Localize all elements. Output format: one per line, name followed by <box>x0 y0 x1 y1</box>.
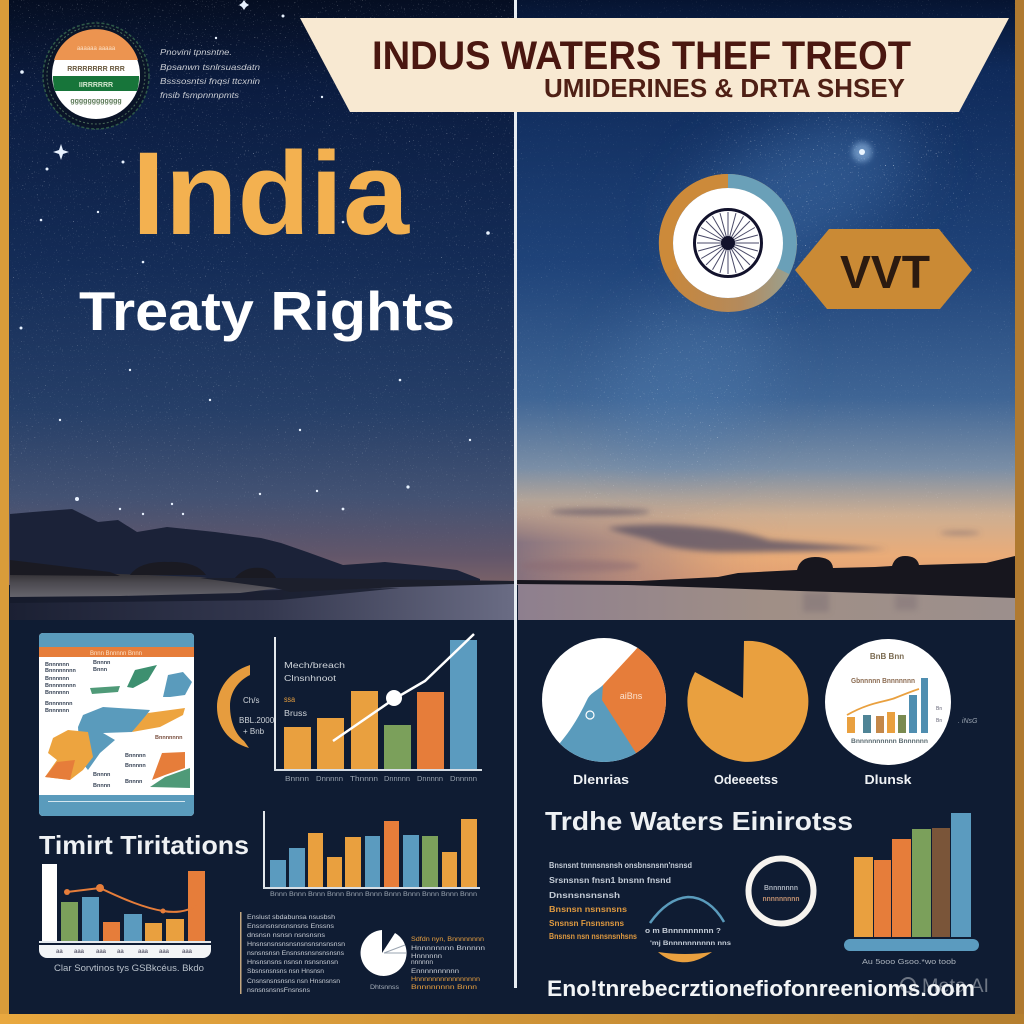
text block: lower right notes: Bnsnsn nsnsnsns <box>549 905 628 914</box>
chart: bar chart with trend line: Dnnnnn <box>417 776 443 783</box>
chart: small pie with legend: Ennnnnnnnnn <box>411 969 459 975</box>
dark lower panel <box>10 620 1015 1014</box>
emblem: seal with tricolour: aaaaaa aaaaa <box>77 46 116 52</box>
chart: bars on tray with line: aaa <box>74 949 85 955</box>
chart: bars on tray with line: aaa <box>182 949 193 955</box>
text block: lower left notes <box>240 912 345 994</box>
chart: small pie with legend: Dhtsnnss <box>370 985 399 991</box>
emblem caption text: Pnovini tpnsntne. <box>160 47 232 57</box>
chart: bars on tray with line: aa <box>56 949 63 955</box>
emblem: seal with tricolour: RRRRRRRR RRR <box>67 66 125 73</box>
chart: bar chart with trend line: Bnnnn <box>285 776 309 783</box>
text block: lower right notes: Srsnsnsn fnsn1 bnsnn fnsnd <box>549 876 671 885</box>
ring with label: nnnnnnnnn <box>762 896 800 903</box>
ring with label: Bnnnnnnn <box>764 885 798 892</box>
heading: Trdhe Waters Einirotss: Trdhe Waters Einirotss <box>545 806 853 836</box>
text block: lower left notes: Sbsnsnsnsns nsn Hnsnsn <box>247 969 324 975</box>
gauge arc: + Bnb <box>243 727 265 736</box>
map legend text: Bnnnnnnnn <box>45 668 76 674</box>
divider <box>514 0 517 988</box>
chart: small pie with legend <box>361 930 485 991</box>
gauge arc: Ch/s <box>243 696 259 705</box>
landscape: right water <box>518 584 1015 620</box>
landscape: left water <box>10 584 514 620</box>
map legend text: Bnnnnn <box>125 763 146 769</box>
map legend text: Bnnnnnn <box>45 676 70 682</box>
chart: white circle with mini chart: BnB Bnn <box>870 652 904 661</box>
map shapes <box>45 665 192 788</box>
emblem caption text <box>160 47 260 100</box>
chart: small pie with legend: Sdfdn nyn, Bnnnnnnnn <box>411 937 484 943</box>
text block: lower left notes: nsnsnsnsn Ensnsnsnsnsnsnsns <box>247 951 344 957</box>
chart: white circle with mini chart: Bn <box>936 706 942 712</box>
chart: bars on tray with line: aaa <box>159 949 170 955</box>
chart: bars on tray with line: aaa <box>138 949 149 955</box>
map legend text: Bnnnnn <box>125 753 146 759</box>
chart: small pie with legend: Bnnnnnnnn Bnnn <box>411 985 477 991</box>
footer text: Enoǃtnrebecrztionefiofonreenioms.oom <box>547 976 975 1001</box>
text block: lower right notes: Dnsnsnsnsnsh <box>549 891 620 900</box>
chart: bar chart with trend line: Bruss <box>284 709 307 718</box>
chart: bar chart with trend line: ssa <box>284 695 295 704</box>
text block: lower right notes: Snsnsn Fnsnsnsns <box>549 919 625 928</box>
chart: three-segment pie <box>540 636 670 787</box>
title banner <box>300 18 1009 112</box>
landscape: right shore with trees <box>517 556 1015 598</box>
map legend text <box>45 660 183 789</box>
gauge arc: BBL.2000 <box>239 716 275 725</box>
chart: stepped bars on blue base <box>844 813 979 966</box>
emblem: seal with tricolour: gggggggggggg <box>70 98 122 105</box>
landscape: left mountains <box>10 509 480 584</box>
emblem caption text: Bsssosntsi fnqsi ttcxnin <box>160 76 260 86</box>
ring with label <box>748 858 814 924</box>
chart: bar chart with trend line: Thnnnn <box>350 776 378 783</box>
chart: three-segment pie: Dlenrias <box>573 772 629 787</box>
map legend text: Bnnnnnnnn <box>45 683 76 689</box>
chart: orange pie with notch <box>687 641 808 787</box>
map legend text: Bnnnnnn <box>45 708 70 714</box>
chart: bars on tray with line: Clar Sorvtinos tys GSBkcéus. Bkdo <box>54 963 204 973</box>
hexagon badge <box>795 229 972 309</box>
chart: white circle with mini chart: Bnnnnnnnnnn Bnnnnnn <box>851 738 928 745</box>
chart: bar chart with trend line: Clnsnhnoot <box>284 674 337 683</box>
chart: stepped bars on blue base: Au 5ooo Gsoo.*wo toob <box>862 957 956 966</box>
emblem caption text: fnsib fsmpnnnpmts <box>160 90 240 100</box>
chart: small pie with legend: Hnnnnnnnnnnnnnnnn <box>411 977 480 983</box>
map legend text: Bnnnn <box>125 779 143 785</box>
icon: Ashoka chakra donut <box>666 181 790 305</box>
map legend text: Bnnnn <box>93 772 111 778</box>
chart: bars on tray with line <box>39 864 211 973</box>
chart: bar chart with trend line: Dnnnnn <box>316 776 343 783</box>
map legend text: Bnnnn <box>93 783 111 789</box>
chart: arc gauge with text: o m Bnnnnnnnnn ? <box>645 928 721 935</box>
landscape: clouds over the river <box>520 508 980 572</box>
text block: lower left notes: nsnsnsnsnsFnsnsns <box>247 988 310 994</box>
chart: eleven-bar chart: Bnnn Bnnn Bnnn Bnnn Bnnn Bnnn Bnnn Bnnn Bnnn Bnnn Bnnn <box>270 892 477 898</box>
emblem caption text: Bpsanwn tsnlrsuasdatn <box>160 62 260 72</box>
background: night sky panels <box>0 0 1024 585</box>
chart: bar chart with trend line: Dnnnnn <box>384 776 410 783</box>
watermark: Meta AI <box>922 976 989 997</box>
title: INDUS WATERS THEF TREOT <box>372 34 911 78</box>
chart: bars on tray with line: aaa <box>96 949 107 955</box>
text block: lower left notes: Cnsnsnsnsnsns nsn Hnsnsnsn <box>247 979 340 985</box>
subtitle: UMIDERINES & DRTA SHSEY <box>544 73 905 103</box>
text block: lower left notes: Hnsnsnsns nsnsn nsnsnsnsn <box>247 960 338 966</box>
hexagon badge: VVT <box>840 246 930 298</box>
text block: lower left notes: Enssnsnsnsnsnsns Enssns <box>247 924 334 930</box>
text block: lower left notes: Enslust sbdabunsa nsusbsh <box>247 915 335 921</box>
emblem: seal with tricolour <box>43 23 149 129</box>
chart: bar chart with trend line: Dnnnnn <box>450 776 477 783</box>
chart: arc gauge with text: 'mj Bnnnnnnnnnn nns <box>650 940 731 947</box>
landscape: left shore <box>10 560 514 597</box>
chart: small pie with legend: nnnnnn <box>411 960 433 966</box>
map legend text: Bnnnnnn <box>45 662 70 668</box>
emblem: seal with tricolour: IIRRRRRR <box>79 82 113 89</box>
chart: bar chart with trend line <box>274 634 482 783</box>
heading: Timirt Tiritations: Timirt Tiritations <box>39 830 249 860</box>
chart: white circle with mini chart: Dlunsk <box>864 772 912 787</box>
map legend text: Bnnnnnn <box>45 690 70 696</box>
chart: bars on tray with line: aa <box>117 949 124 955</box>
stars: bright stars on left sky <box>20 0 490 515</box>
map legend text: Bnnn <box>93 667 108 673</box>
heading: India: India <box>132 128 410 260</box>
chart: orange pie with notch: Odeeeetss <box>714 772 778 787</box>
chart: white circle with mini chart: Bn <box>936 718 942 724</box>
chart: small pie with legend: Hnnnnnn <box>411 954 442 960</box>
chart: white circle with mini chart <box>825 639 951 787</box>
text block: lower left notes: dnsnsn nsnsn nsnsnsns <box>247 933 325 939</box>
text block: lower left notes: Hnsnsnsnsnsnsnsnsnsnsnsnsn <box>247 942 345 948</box>
small note: . iNsG <box>958 718 978 725</box>
panel: map card <box>39 633 194 816</box>
text block: lower right notes <box>549 861 692 941</box>
chart: small pie with legend: Hnnnnnnnn Bnnnnn <box>411 946 485 952</box>
panel: map card: Bnnn Bnnnnn Bnnn <box>90 651 142 657</box>
chart: arc gauge with text <box>645 897 731 962</box>
heading: Treaty Rights: Treaty Rights <box>79 280 455 342</box>
gauge arc <box>217 665 275 748</box>
text block: lower right notes: Bnsnsnt tnnnsnsnsh onsbnsnsnn'nsnsd <box>549 861 692 870</box>
map legend text: Bnnnnnnn <box>155 735 183 741</box>
chart: bar chart with trend line: Mech/breach <box>284 661 345 670</box>
chart: white circle with mini chart: Gbnnnnn Bnnnnnnn <box>851 676 915 685</box>
text block: lower right notes: Bnsnsn nsn nsnsnsnhsns <box>549 932 637 941</box>
map legend text: Bnnnnnnn <box>45 701 73 707</box>
map legend text: Bnnnn <box>93 660 111 666</box>
chart: eleven-bar chart <box>263 811 480 898</box>
chart: three-segment pie: aiBns <box>620 691 643 701</box>
